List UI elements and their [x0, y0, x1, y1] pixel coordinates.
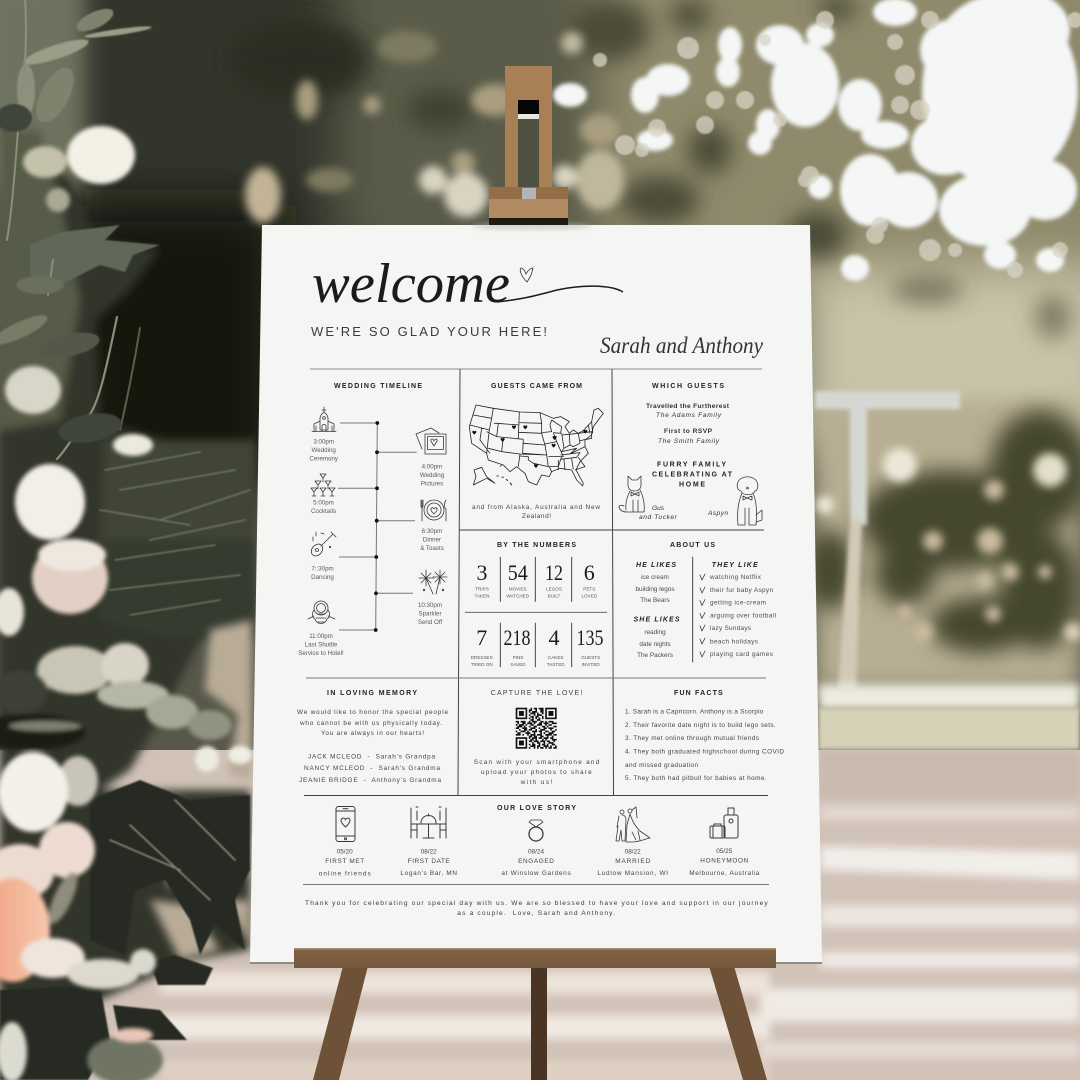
story 2: 08/22	[421, 849, 437, 856]
icon: dinner plate	[421, 500, 446, 521]
panel: which guests: WHICH GUESTS	[652, 383, 724, 390]
beige gaps through leaves	[150, 620, 252, 960]
he likes: HE LIKES	[636, 562, 676, 569]
icon: sparklers	[419, 570, 447, 594]
panel: which guests: Gus	[652, 505, 665, 512]
stats row 2: TASTED	[547, 662, 565, 667]
panel: about us	[634, 542, 776, 662]
label: dinner: 6:30pm	[422, 528, 442, 535]
icon: phone	[336, 806, 355, 842]
story 2: Logan's Bar, MN	[400, 870, 457, 877]
stats row 2: PINS	[513, 655, 523, 660]
panel: capture the love: Scan with your smartphone and	[474, 759, 600, 766]
cluster	[37, 646, 113, 694]
stats row 1: 54	[508, 560, 528, 585]
he likes	[634, 562, 680, 659]
icon: photographs	[416, 428, 446, 454]
they like	[700, 562, 776, 658]
label: pictures: Wedding	[420, 472, 445, 479]
label: shuttle: 11:00pm	[309, 633, 333, 640]
label: cocktails: Cocktails	[311, 508, 336, 515]
grid lines	[303, 369, 769, 884]
panel: which guests	[619, 383, 762, 525]
panel: fun facts: FUN FACTS	[674, 690, 723, 697]
closing thank you note: as a couple. Love, Sarah and Anthony.	[457, 910, 615, 917]
icon: champagne tower	[311, 474, 335, 496]
panel: fun facts	[625, 690, 784, 782]
panel: fun facts: 5. They both had pitbull for babies at home.	[625, 775, 767, 782]
foliage and flowers on the left	[0, 0, 256, 1080]
panel: guests came from: Zealand!	[522, 513, 551, 520]
panel: fun facts: 4. They both graduated highschool during COVID	[625, 748, 784, 756]
icon: guitar	[309, 532, 336, 558]
they like: their fur baby Aspyn	[710, 587, 773, 594]
panel: which guests: The Adams Family	[656, 412, 722, 419]
story 4: 08/22	[625, 849, 641, 856]
label: sparkler: Sparkler	[418, 610, 442, 618]
hedge base	[818, 684, 1080, 710]
panel: capture the love: with us!	[520, 779, 553, 786]
icon: dinner table	[411, 807, 446, 838]
label: dinner: Dinner	[423, 536, 441, 544]
stats row 1: MOVIES	[509, 586, 527, 592]
story 2: FIRST DATE	[408, 858, 450, 865]
story 5: HONEYMOON	[700, 858, 749, 864]
panel: which guests: The Smith Family	[658, 438, 720, 445]
they like: lazy Sundays	[710, 625, 751, 632]
they like: getting ice-cream	[710, 600, 766, 606]
label: dancing: Dancing	[311, 574, 334, 581]
he likes: building legos	[635, 586, 675, 593]
icon: church	[312, 407, 336, 432]
white bokeh foliage	[553, 0, 1078, 281]
panel: fun facts: 3. They met online through mutual friends	[625, 735, 759, 742]
stats row 2: INVITED	[582, 662, 600, 667]
panel: fun facts: 1. Sarah is a Capricorn. Anthony is a Scorpio	[625, 708, 764, 716]
fence	[815, 391, 960, 690]
stats row 2: SAVED	[510, 662, 526, 667]
panel: capture the love: CAPTURE THE LOVE!	[491, 690, 582, 697]
they like: playing card games	[710, 651, 773, 658]
panel: about us: ABOUT US	[670, 542, 715, 549]
panel: which guests: FURRY FAMILY	[657, 462, 726, 468]
panel: fun facts: and missed graduation	[625, 762, 698, 769]
story 3: 08/24	[528, 849, 544, 856]
story 5: Melbourne, Australia	[689, 870, 760, 877]
stats row 2	[471, 625, 604, 667]
timeline spine	[338, 421, 417, 632]
story 3: at Winslow Gardens	[501, 870, 571, 877]
stats row 1: TAKEN	[475, 594, 489, 598]
stats row 2: 4	[548, 625, 560, 650]
QR code	[516, 709, 557, 748]
stats row 1: 6	[584, 560, 595, 585]
panel: in loving memory	[297, 690, 448, 784]
story 4: MARRIED	[615, 858, 651, 865]
icon: luggage	[710, 808, 738, 838]
pale leaves	[17, 4, 152, 128]
label: cocktails: 5:00pm	[313, 500, 334, 506]
icon: dog	[737, 477, 762, 525]
story 4	[597, 849, 668, 877]
blurred tree canopy	[60, 0, 1080, 460]
easel ledge	[294, 948, 776, 968]
they like: arguing over football	[710, 612, 776, 620]
US map	[469, 405, 603, 486]
main foliage mass	[0, 120, 256, 1080]
ground	[0, 750, 1080, 1080]
map hearts	[472, 425, 587, 468]
stats row 2: GUESTS	[581, 655, 600, 660]
story 5: 05/25	[716, 848, 733, 855]
story 4: Ludlow Mansion, WI	[597, 870, 668, 877]
panel: by the numbers	[465, 542, 607, 667]
panel: wedding timeline	[298, 383, 447, 657]
panel: in loving memory: We would like to honor the special people	[297, 709, 448, 716]
stats row 2: 7	[476, 625, 487, 650]
panel: in loving memory: NANCY MCLEOD - Sarah's Grandma	[304, 765, 440, 772]
story 3	[501, 849, 571, 877]
panel: our love story	[319, 805, 760, 878]
label: shuttle: Service to Hotel!	[298, 650, 344, 657]
title: welcome script: welcome	[312, 253, 510, 315]
he likes: The Packers	[637, 652, 673, 659]
top left grey green	[0, 0, 85, 190]
stats row 2: CAKES	[548, 655, 563, 660]
story 1: 05/20	[337, 849, 353, 856]
stats row 1: LOVED	[582, 594, 598, 598]
label: sparkler: Send Off	[418, 619, 442, 626]
icon: last shuttle veil	[308, 601, 335, 624]
blurred foliage right	[806, 400, 1080, 690]
label: ceremony: Ceremony	[309, 456, 339, 462]
panel: by the numbers: BY THE NUMBERS	[497, 542, 576, 549]
couple names: Sarah and Anthony	[600, 333, 764, 358]
he likes: The Bears	[640, 597, 670, 604]
panel: which guests: and Tucker	[639, 514, 678, 521]
he likes: reading	[644, 629, 666, 636]
dark bottom leaves	[0, 780, 250, 1080]
they like: watching Netflix	[709, 574, 762, 581]
stats row 2: DRESSES	[471, 655, 493, 660]
they like: beach holidays	[710, 638, 758, 646]
stats row 1: WATCHED	[506, 594, 530, 598]
panel: which guests: HOME	[679, 482, 705, 488]
stats row 2: 135	[576, 625, 604, 650]
panel: wedding timeline: WEDDING TIMELINE	[334, 383, 422, 390]
beige bokeh	[245, 31, 624, 223]
label: sparkler: 10:30pm	[418, 602, 442, 609]
stats row 1: 3	[476, 560, 488, 585]
label: pictures: 4:00pm	[422, 464, 442, 470]
story 2	[400, 849, 457, 877]
flowers	[0, 126, 252, 1080]
icon: wedding couple	[616, 807, 650, 842]
he likes: SHE LIKES	[634, 616, 680, 624]
panel: our love story: OUR LOVE STORY	[497, 805, 576, 812]
label: dancing: 7::30pm	[311, 566, 334, 572]
stats row 1: LEGOS	[546, 586, 562, 592]
closing thank you note: Thank you for celebrating our special day with us. We are so blessed to have your love and support in our journey	[305, 900, 768, 907]
panel: in loving memory: JACK MCLEOD - Sarah's Grandpa	[308, 754, 435, 760]
panel: fun facts: 2. Their favorite date night is to build lego sets.	[625, 722, 776, 729]
panel: capture the love	[474, 690, 600, 786]
serrated leaf	[30, 225, 160, 285]
panel: in loving memory: who cannot be with us physically today.	[299, 720, 442, 727]
stats row 2: 218	[504, 625, 530, 650]
label: dinner: & Toasts	[420, 545, 444, 552]
label: shuttle: Last Shuttle	[305, 642, 338, 648]
icon: engagement ring	[529, 820, 543, 841]
Alaska and Hawaii	[473, 467, 495, 485]
stats row 2: TRIED ON	[471, 662, 493, 667]
panel: guests came from	[469, 383, 603, 520]
stats row 1: 12	[545, 560, 563, 585]
story 3: ENGAGED	[518, 858, 554, 865]
story 5	[689, 848, 760, 877]
easel bottom legs	[313, 966, 767, 1080]
he likes: ice cream	[641, 574, 669, 581]
panel: in loving memory: IN LOVING MEMORY	[327, 690, 417, 697]
he likes: date nights	[639, 641, 671, 648]
stats row 1: BUILT	[548, 594, 561, 598]
easel top clamp	[489, 66, 568, 225]
they like: THEY LIKE	[712, 562, 758, 569]
stats row 1: PETS	[583, 586, 595, 592]
story 1	[319, 849, 371, 878]
dark leaves near the white stems	[0, 104, 124, 447]
label: ceremony: Wedding	[312, 447, 336, 454]
story 1: FIRST MET	[325, 858, 364, 865]
closing thank you note	[305, 900, 768, 917]
story 1: online friends	[319, 870, 371, 878]
panel: which guests: CELEBRATING AT	[652, 472, 733, 478]
panel: guests came from: GUESTS CAME FROM	[491, 383, 582, 390]
leaf streaks	[100, 452, 250, 900]
panel: in loving memory: JEANIE BRIDGE - Anthony's Grandma	[299, 777, 441, 784]
panel: which guests: Aspyn	[707, 510, 728, 517]
caption: and from Alaska, Australia and New	[472, 504, 600, 511]
label: ceremony: 3:00pm	[313, 438, 334, 446]
panel: capture the love: upload your photos to share	[481, 769, 592, 776]
stats row 1: TRIPS	[475, 586, 489, 592]
sign board	[250, 222, 822, 964]
label: pictures: Pictures	[421, 480, 443, 488]
icon: cat	[619, 476, 644, 512]
subtitle: WE'RE SO GLAD YOUR HERE!	[311, 324, 547, 339]
panel: in loving memory: You are always in our hearts!	[321, 730, 424, 737]
stats row 1	[475, 560, 598, 598]
panel: which guests: First to RSVP	[664, 428, 713, 435]
panel: which guests: Travelled the Furtherest	[646, 403, 730, 410]
title: welcome script	[312, 253, 623, 315]
